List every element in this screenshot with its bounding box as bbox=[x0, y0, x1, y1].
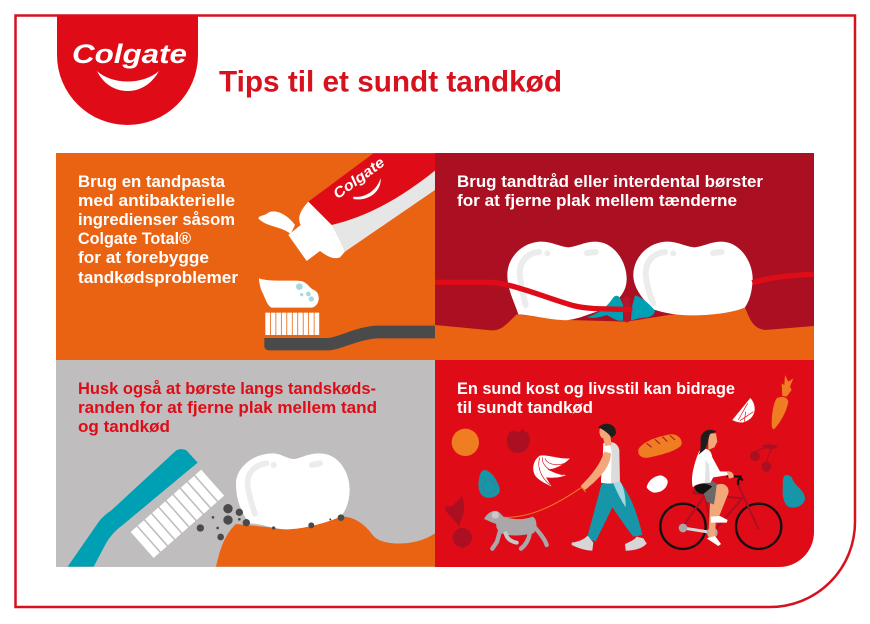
plaque bbox=[587, 295, 655, 321]
dog ear bbox=[492, 511, 499, 519]
walker bbox=[572, 424, 642, 551]
logo smile bbox=[97, 71, 159, 91]
icon: beetroot bbox=[445, 496, 472, 549]
interdental pick bbox=[616, 300, 638, 319]
panel text: brushing: og tandkød bbox=[78, 417, 170, 436]
icon: citrus slice bbox=[732, 398, 755, 423]
gum bbox=[216, 517, 435, 567]
plaque particles bbox=[197, 504, 344, 540]
walker shoe bbox=[572, 536, 593, 551]
illustration: toothpaste tube and brush bbox=[258, 153, 435, 350]
cyclist saddle bbox=[692, 491, 708, 495]
panel: lifestyle bbox=[435, 360, 814, 567]
bicycle bbox=[660, 476, 781, 549]
panel text: toothpaste: ingredienser såsom bbox=[78, 210, 235, 229]
walker torso bbox=[601, 442, 620, 484]
illustration: right foods and cyclist bbox=[625, 375, 805, 551]
logo badge bbox=[57, 15, 198, 125]
cyclist front leg bbox=[712, 484, 729, 518]
panel text: floss: Brug tandtråd eller interdental børster bbox=[457, 172, 763, 191]
icon: pear bbox=[783, 475, 805, 508]
panel text: toothpaste: Brug en tandpasta bbox=[78, 172, 226, 191]
logo wordmark: Colgate bbox=[72, 39, 187, 69]
panel: toothpaste bbox=[56, 153, 435, 360]
floss bbox=[435, 274, 814, 310]
cyclist back leg bbox=[708, 503, 717, 538]
tube logo: Colgate bbox=[331, 155, 388, 203]
dog lead bbox=[503, 487, 586, 517]
icon: apple bbox=[507, 427, 530, 453]
toothpaste tube bbox=[258, 153, 435, 261]
panel text: toothpaste: Colgate Total® bbox=[78, 229, 191, 248]
dog body bbox=[484, 511, 536, 535]
icon: lemon bbox=[647, 475, 668, 493]
panel text: toothpaste: for at forebygge bbox=[78, 248, 209, 267]
gum bbox=[435, 307, 814, 360]
panel text: brushing: randen for at fjerne plak mellem tand bbox=[78, 398, 377, 417]
panel text: lifestyle: til sundt tandkød bbox=[457, 398, 593, 417]
walker arm bbox=[581, 452, 611, 490]
icon: avocado bbox=[478, 470, 500, 498]
panel text: toothpaste bbox=[78, 172, 238, 287]
cyclist head and hair bbox=[708, 433, 717, 450]
dog bbox=[484, 511, 547, 549]
bicycle chainwheel bbox=[679, 524, 718, 538]
cyclist hand bbox=[727, 471, 734, 479]
panel text: lifestyle: En sund kost og livsstil kan bidrage bbox=[457, 379, 735, 398]
panel text: floss bbox=[457, 172, 763, 210]
cyclist torso bbox=[692, 449, 729, 487]
walker head bbox=[599, 427, 612, 446]
illustration: teeth and floss bbox=[435, 242, 814, 360]
panel text: brushing: Husk også at børste langs tandskøds- bbox=[78, 379, 376, 398]
panel text: toothpaste: med antibakterielle bbox=[78, 191, 235, 210]
bristles bbox=[265, 313, 319, 335]
walker legs bbox=[587, 482, 642, 542]
icon: bread bbox=[638, 434, 682, 458]
brush handle bbox=[68, 449, 198, 567]
walker shoe bbox=[625, 537, 647, 551]
icon: carrot bbox=[772, 375, 793, 429]
cyclist shorts bbox=[694, 481, 719, 505]
icon: orange bbox=[452, 429, 479, 456]
icon: banana bbox=[533, 455, 570, 486]
title: Tips til et sundt tandkød bbox=[219, 66, 562, 98]
icon: cherries bbox=[750, 444, 778, 472]
illustration: left foods, dog and walker bbox=[445, 424, 642, 551]
panel: floss bbox=[435, 153, 814, 360]
tooth bbox=[236, 453, 350, 529]
panel text: brushing bbox=[78, 379, 377, 436]
dog legs bbox=[492, 526, 547, 549]
cyclist bbox=[692, 430, 734, 546]
tooth right bbox=[633, 242, 753, 315]
panel: brushing bbox=[56, 360, 435, 567]
panel text: lifestyle bbox=[457, 379, 735, 417]
brush handle bbox=[264, 326, 435, 350]
paste on brush bbox=[259, 278, 319, 308]
panel text: toothpaste: tandkødsproblemer bbox=[78, 268, 238, 287]
illustration: brush and tooth bbox=[68, 449, 435, 567]
bristles bbox=[134, 472, 221, 555]
tooth left bbox=[507, 242, 627, 320]
panel text: floss: for at fjerne plak mellem tænderne bbox=[457, 191, 737, 210]
